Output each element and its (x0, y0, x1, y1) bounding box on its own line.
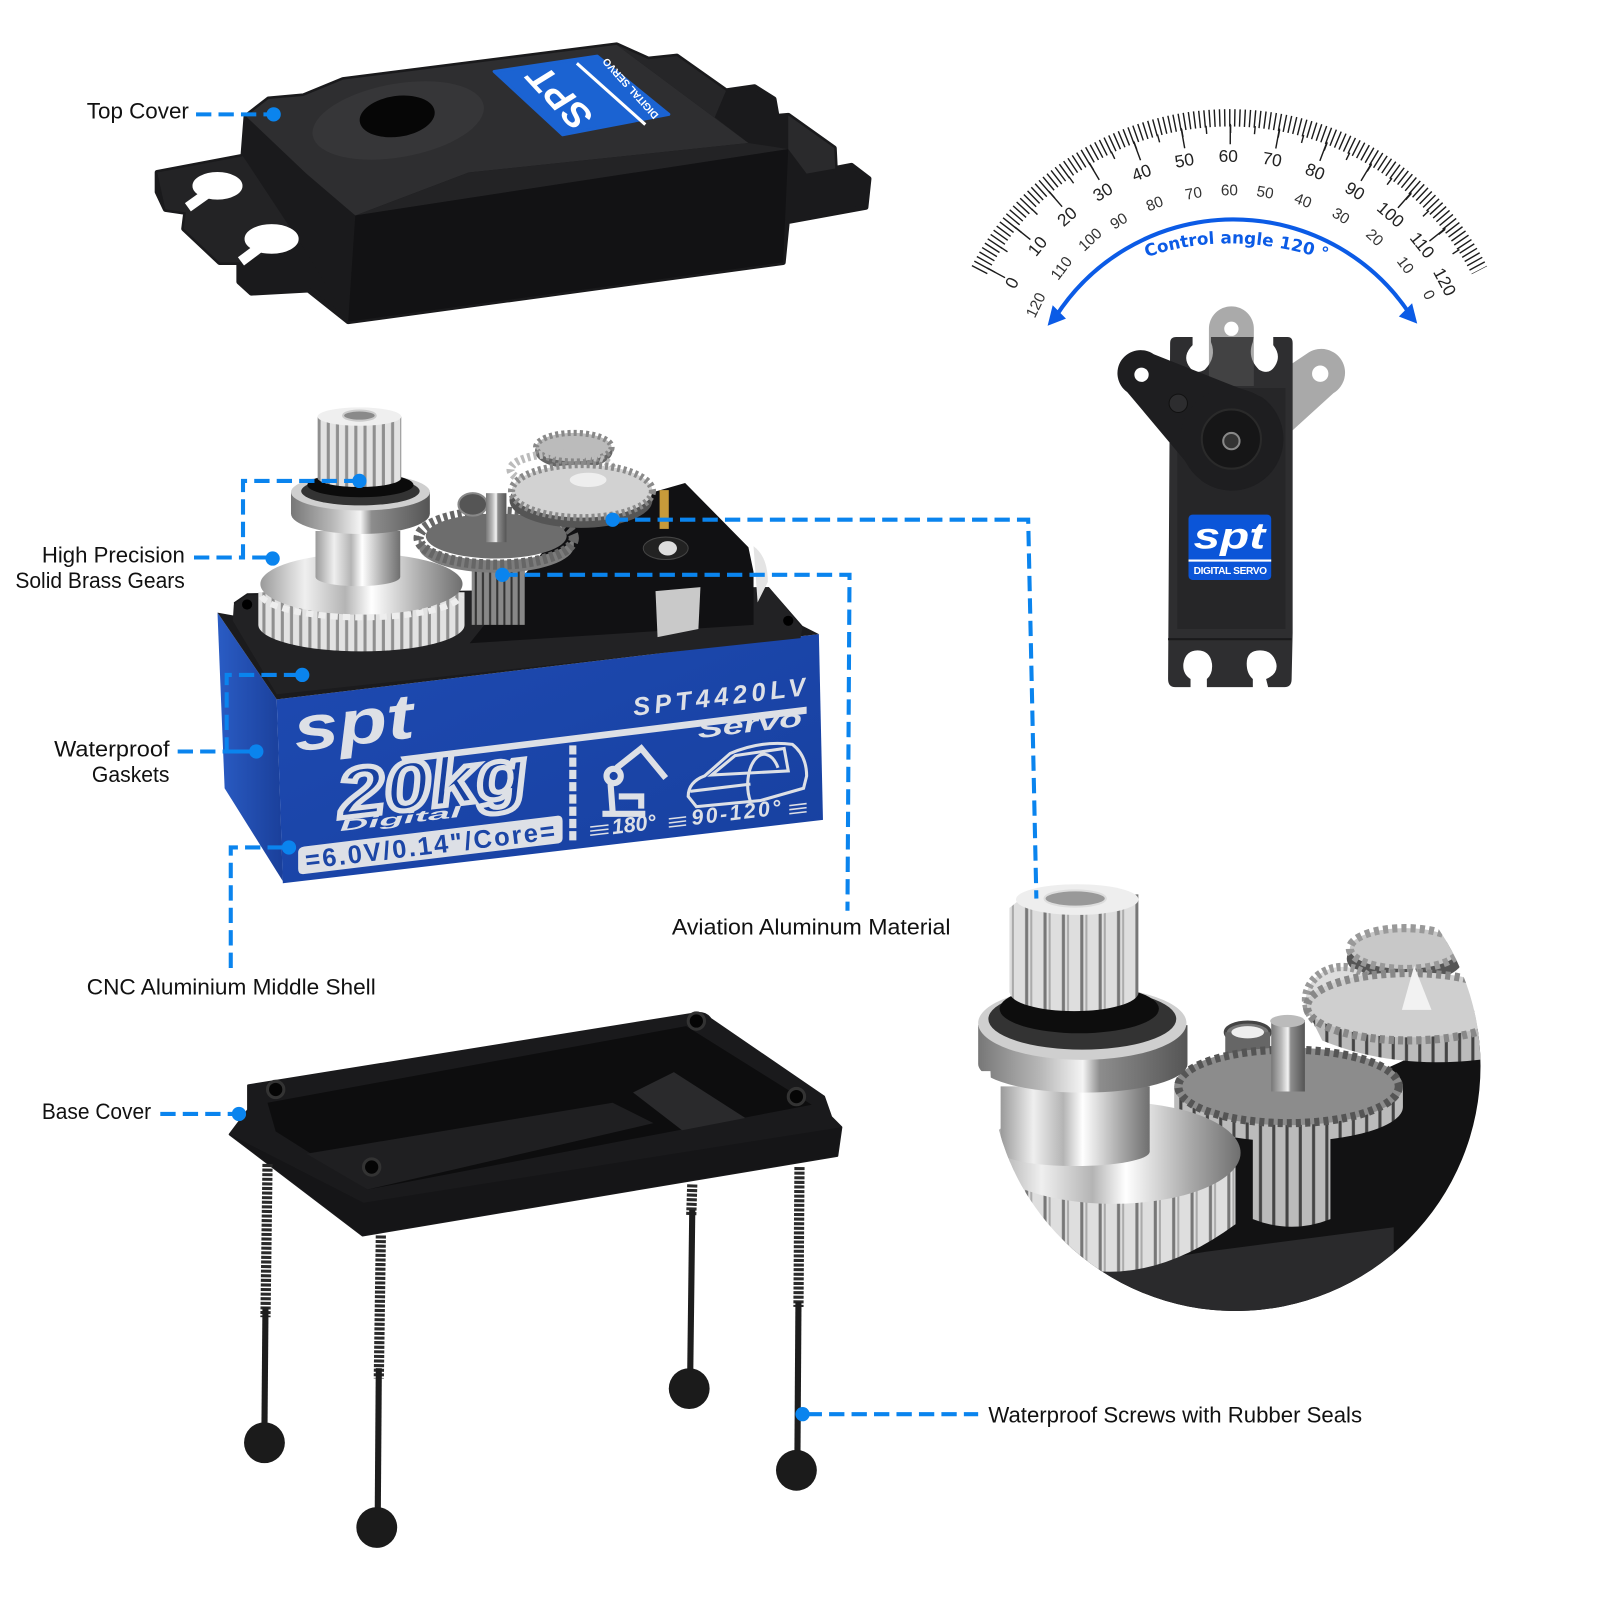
black gearbox tower (470, 483, 754, 643)
protractor inner numbers: 0 (1419, 288, 1438, 303)
upper large gear (510, 465, 652, 528)
callout: high precision solid brass gears: High Precision (42, 543, 185, 568)
engraved SPT logo: spt (289, 681, 421, 765)
control angle label (1145, 231, 1328, 256)
tower screw (643, 537, 688, 560)
model number: SPT4420LV (631, 673, 809, 722)
protractor outer numbers: 110 (1406, 228, 1439, 262)
protractor inner numbers: 90 (1107, 210, 1131, 233)
pinion gear (472, 564, 525, 625)
engraved hatch marks (590, 804, 807, 835)
digital word: Digital (338, 803, 464, 835)
screw 3 (669, 1184, 710, 1409)
dark base plate (1065, 1028, 1480, 1311)
callout: aviation aluminum material (495, 568, 951, 939)
protractor outer numbers: 80 (1303, 159, 1328, 184)
angle values (610, 795, 783, 839)
callout: base cover (42, 1099, 246, 1124)
protractor inner numbers: 30 (1329, 205, 1352, 228)
ghost right horn (1225, 349, 1345, 434)
protractor inner numbers: 20 (1362, 226, 1386, 250)
car icon (688, 743, 807, 807)
torque rating: 20kg (331, 733, 531, 833)
tray cavity (268, 1026, 812, 1190)
engraved case graphics (289, 673, 809, 875)
callout: waterproof screws: Waterproof Screws with Rubber Seals (988, 1402, 1362, 1427)
ghost upper horn (1209, 306, 1254, 386)
angle values: 90-120° (690, 795, 783, 830)
control angle label: Control angle 120 ° (1145, 231, 1328, 256)
callout: waterproof screws (795, 1402, 1362, 1427)
upper small gear (511, 433, 613, 486)
brass contact (660, 490, 669, 529)
angle values: 180° (610, 810, 658, 839)
silver block (656, 587, 700, 637)
protractor outer numbers: 0 (1001, 274, 1023, 292)
top mounting slots (1186, 335, 1278, 372)
protractor outer numbers: 20 (1053, 203, 1081, 230)
front view servo with rotating horn (1117, 306, 1345, 687)
detail large gear (985, 1102, 1241, 1272)
bearing (291, 473, 430, 534)
protractor outer numbers: 40 (1129, 160, 1154, 185)
callout: waterproof gaskets (54, 668, 309, 787)
blue case front face (277, 634, 823, 883)
protractor inner numbers (1023, 182, 1438, 320)
callout: aviation aluminum material: Aviation Aluminum Material (672, 914, 951, 939)
protractor inner numbers: 40 (1292, 190, 1314, 212)
chain divider (569, 745, 576, 841)
protractor inner numbers: 80 (1144, 193, 1166, 215)
output shaft (316, 531, 400, 586)
protractor inner numbers: 10 (1393, 254, 1417, 277)
black gasket plate (217, 587, 819, 699)
large output gear (258, 553, 465, 651)
detail bearing (978, 984, 1187, 1093)
callout: high precision solid brass gears (15, 474, 367, 593)
servo horn (1117, 350, 1283, 491)
servo body (1168, 337, 1293, 687)
servo word: Servo (696, 705, 803, 743)
protractor inner numbers: 50 (1255, 183, 1275, 203)
screw 2 (356, 1235, 397, 1548)
protractor tick marks (979, 118, 1479, 273)
callout: top cover (87, 98, 281, 123)
callout: top cover: Top Cover (87, 98, 189, 123)
callout: leader to detail view (605, 513, 1036, 899)
screw 4 (776, 1167, 817, 1491)
mid compound gear (419, 493, 574, 573)
top cover shaft hole (357, 91, 437, 142)
protractor scale (972, 109, 1488, 326)
detail shaft (1001, 1086, 1150, 1166)
detail pinion (1252, 1139, 1330, 1227)
protractor outer numbers: 60 (1219, 146, 1238, 166)
protractor outer numbers: 90 (1342, 177, 1368, 204)
detail upper large gear (1303, 966, 1480, 1062)
protractor outer numbers (1001, 146, 1460, 299)
protractor inner numbers: 70 (1184, 184, 1203, 204)
top cover round boss (306, 69, 490, 172)
top cover blue label (494, 54, 669, 138)
protractor outer numbers: 70 (1261, 148, 1283, 171)
callout: base cover: Base Cover (42, 1099, 152, 1124)
gear detail magnified view (978, 884, 1511, 1321)
protractor outer numbers: 50 (1173, 149, 1196, 172)
detail upper small gear (1306, 928, 1463, 1032)
main servo with gears (217, 407, 823, 883)
tray screw holes (268, 1013, 805, 1175)
callout: CNC aluminium middle shell (87, 840, 376, 999)
protractor outer numbers: 30 (1089, 178, 1116, 205)
engraved bar (400, 707, 807, 763)
blue case side face (217, 613, 283, 881)
callout: CNC aluminium middle shell: CNC Aluminium Middle Shell (87, 974, 376, 999)
protractor inner numbers: 120 (1023, 290, 1050, 320)
detail spline (1010, 884, 1138, 1011)
top cover blue label: DIGITAL SERVO (601, 55, 661, 120)
blue SPT label (1188, 515, 1271, 580)
voltage text: =6.0V/0.14"/Core= (304, 817, 556, 875)
robot arm icon (602, 748, 666, 814)
protractor outer numbers: 120 (1429, 264, 1460, 299)
blue SPT label: DIGITAL SERVO (1194, 566, 1267, 577)
protractor inner numbers: 100 (1075, 225, 1106, 255)
voltage pill (298, 816, 563, 874)
protractor inner numbers: 60 (1221, 182, 1238, 199)
protractor outer numbers: 10 (1024, 232, 1051, 260)
protractor outer numbers: 100 (1373, 197, 1408, 231)
waterproof screws (244, 1164, 817, 1548)
protractor inner numbers: 110 (1048, 254, 1076, 283)
detail mid gear (1174, 1015, 1403, 1142)
control angle arc with arrows (1048, 219, 1417, 326)
output spline (318, 407, 401, 487)
top cover mounting slots (188, 173, 298, 261)
callout: high precision solid brass gears: Solid Brass Gears (15, 568, 185, 593)
callout: waterproof gaskets: Gaskets (92, 762, 169, 787)
callout: waterproof gaskets: Waterproof (54, 737, 170, 762)
screw 1 (244, 1164, 285, 1463)
base cover tray (230, 1013, 841, 1235)
top cover servo case (157, 45, 869, 322)
blue SPT label: spt (1194, 515, 1267, 556)
top cover blue label: SPT (518, 54, 600, 138)
